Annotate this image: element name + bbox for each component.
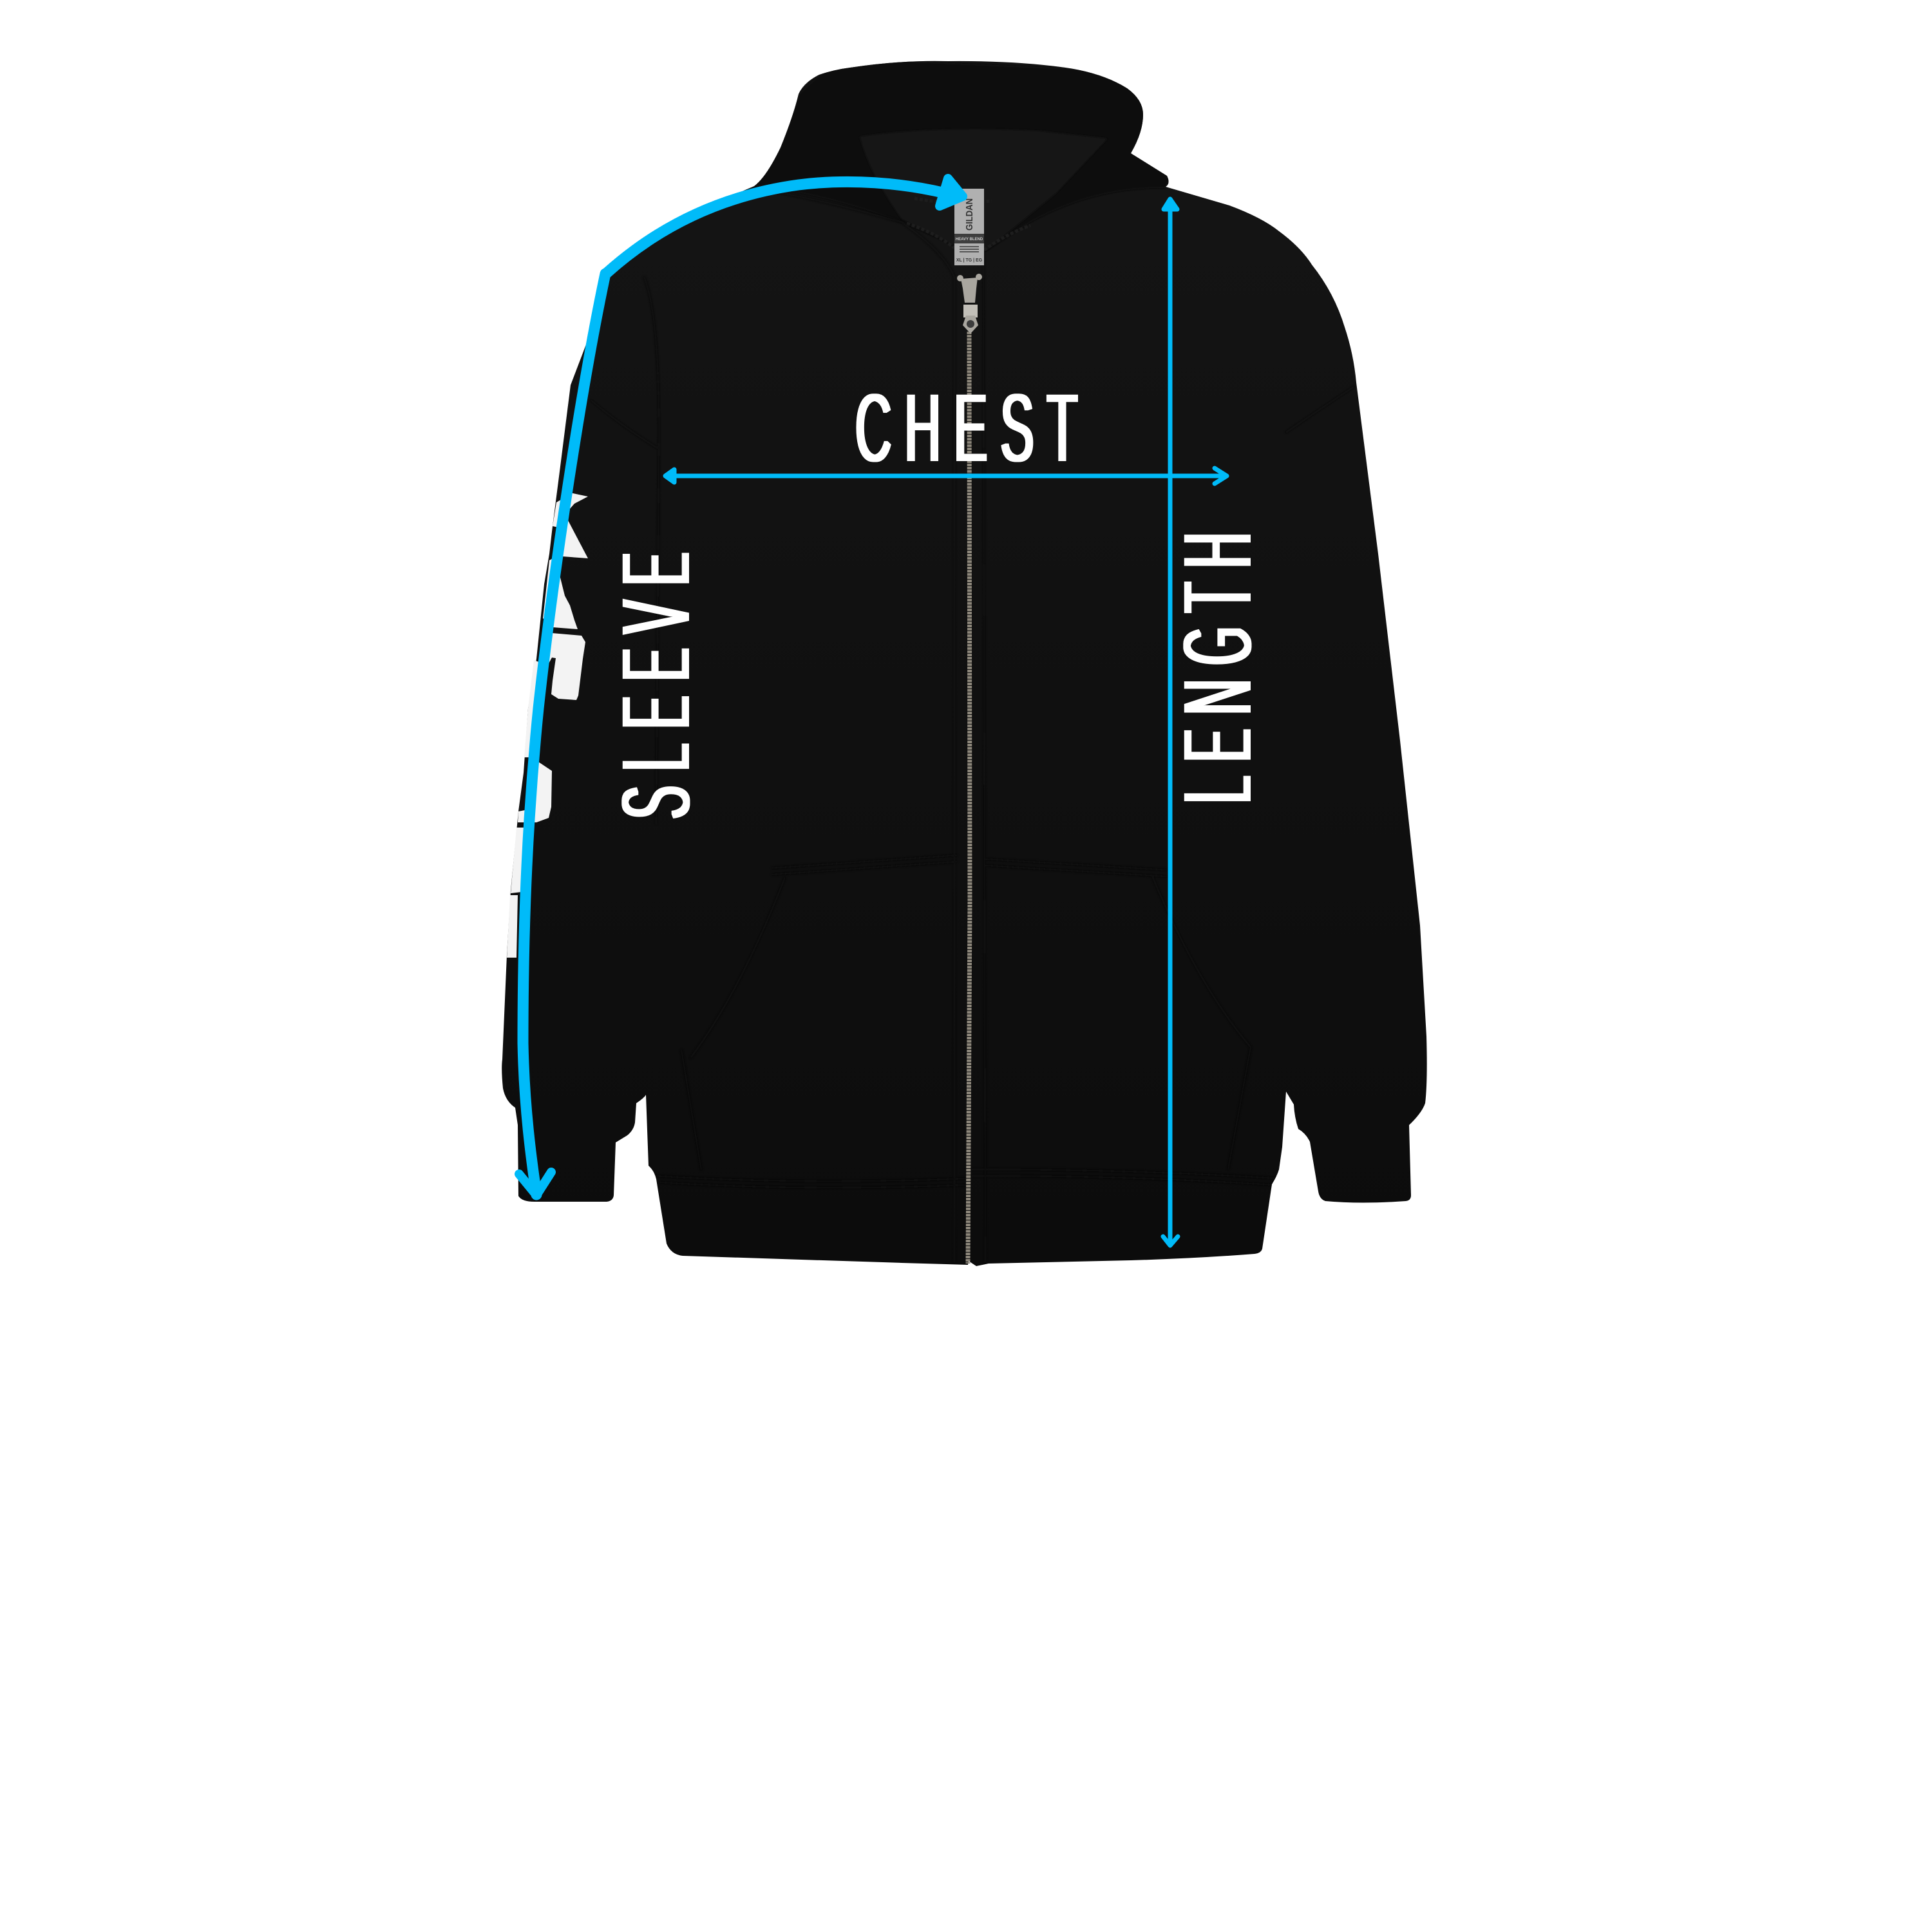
zipper teeth: [968, 332, 970, 1264]
label band text: HEAVY BLEND: [956, 238, 983, 242]
arrow: chest: [665, 468, 1227, 484]
label fine print: [960, 246, 979, 252]
arrow: sleeve and shoulder: [519, 178, 963, 1195]
label size text: XL | TG | EG: [956, 258, 983, 263]
zipper: [957, 274, 982, 1264]
label band: [954, 234, 984, 243]
sleeve print: [507, 492, 588, 958]
hood outer: [754, 58, 1172, 251]
measurement label: length: LENGTH: [1164, 532, 1272, 804]
hoodie garment: [502, 58, 1427, 1266]
sleeve arrow head: [519, 1172, 551, 1195]
hood lining: [860, 129, 1108, 251]
arrow: length: [1163, 199, 1178, 1245]
shoulder arc: [607, 182, 945, 273]
hoodie silhouette: [502, 61, 1427, 1266]
sleeve curve: [523, 274, 605, 1195]
shoulder arrow head: [940, 178, 963, 206]
measurement label: sleeve: SLEEVE: [603, 553, 710, 819]
garment seams: [653, 193, 1276, 1186]
neck label: [954, 189, 984, 265]
measurement label: chest: CHEST: [855, 375, 1077, 482]
zipper pull: [957, 274, 982, 334]
label brand text: GILDAN: [964, 198, 975, 231]
collar ribbing: [907, 198, 1030, 250]
